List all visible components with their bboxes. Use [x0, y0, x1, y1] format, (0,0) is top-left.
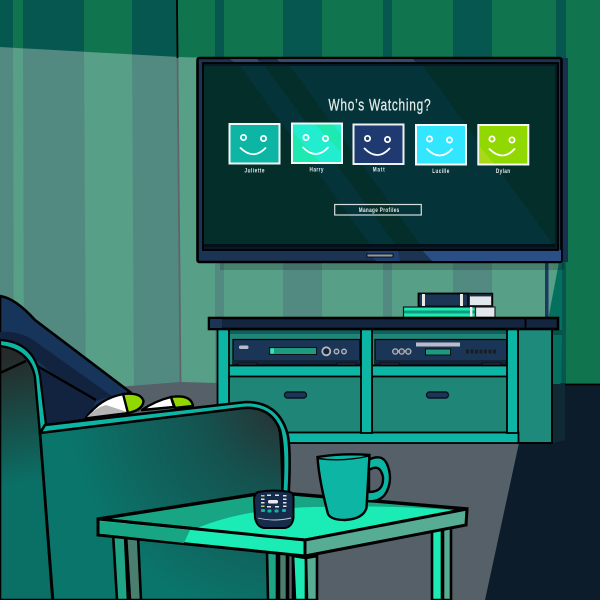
cabinet back: [228, 329, 508, 366]
chair back: [0, 345, 52, 600]
chair arm: [40, 408, 283, 600]
lower box: [404, 307, 495, 318]
left drawer: [228, 376, 362, 433]
wall corner line: [177, 0, 180, 383]
tv inner frame: [203, 63, 558, 250]
profile: Lucille: [416, 125, 466, 175]
profile: Juliette: [230, 124, 280, 175]
tv shadow: [220, 58, 568, 270]
side table: [98, 492, 467, 556]
profile: Matt: Matt: [373, 167, 385, 174]
mug body: [318, 454, 370, 520]
television: [198, 58, 562, 262]
right dvd player: [375, 340, 507, 365]
manage profiles button: [335, 204, 421, 215]
cabinet side panel: [518, 329, 552, 443]
remote control: [254, 490, 294, 528]
table right edge: [305, 509, 467, 556]
profile: Dylan: Dylan: [496, 168, 510, 175]
socks and feet: [86, 394, 193, 418]
mug handle: [367, 457, 390, 501]
tv cabinet: [209, 318, 562, 443]
table top light pool: [195, 506, 459, 538]
heading: who's watching: Who’s Watching?: [328, 97, 431, 115]
right drawer: [372, 376, 508, 433]
profile: Harry: [292, 124, 342, 174]
chair back trim: [0, 340, 46, 433]
tv frame: [198, 58, 562, 262]
tv screen: [204, 66, 555, 248]
upper wall with stripes: [0, 0, 600, 400]
stacked boxes on cabinet: [404, 294, 495, 318]
chair arm trim: [40, 402, 290, 496]
foot one: [86, 394, 144, 418]
cabinet top: [209, 318, 562, 335]
floor: [0, 382, 600, 600]
lit wall area: [0, 47, 559, 400]
table front edge: [98, 519, 305, 556]
tv bezel highlights: [230, 59, 561, 261]
profile: Lucille: Lucille: [432, 168, 449, 175]
tv button: [367, 254, 393, 257]
cabinet frame rails: [218, 329, 518, 443]
manage profiles button: Manage Profiles: [359, 207, 399, 214]
profile: Dylan: [478, 125, 528, 175]
profile: Matt: [354, 124, 404, 174]
profile: Juliette: Juliette: [245, 168, 264, 175]
upper box: [418, 294, 492, 306]
left dvd player: [233, 340, 360, 365]
foot two: [142, 396, 193, 410]
profile: Harry: Harry: [309, 167, 324, 174]
table top: [98, 492, 467, 540]
table legs: [113, 526, 451, 600]
cable behind cabinet: [545, 262, 548, 318]
remote buttons: [261, 494, 286, 512]
legs of person: [0, 296, 130, 424]
shaded wedge beside cabinet: [548, 262, 562, 392]
armchair: [0, 340, 290, 600]
mug: [318, 454, 390, 520]
